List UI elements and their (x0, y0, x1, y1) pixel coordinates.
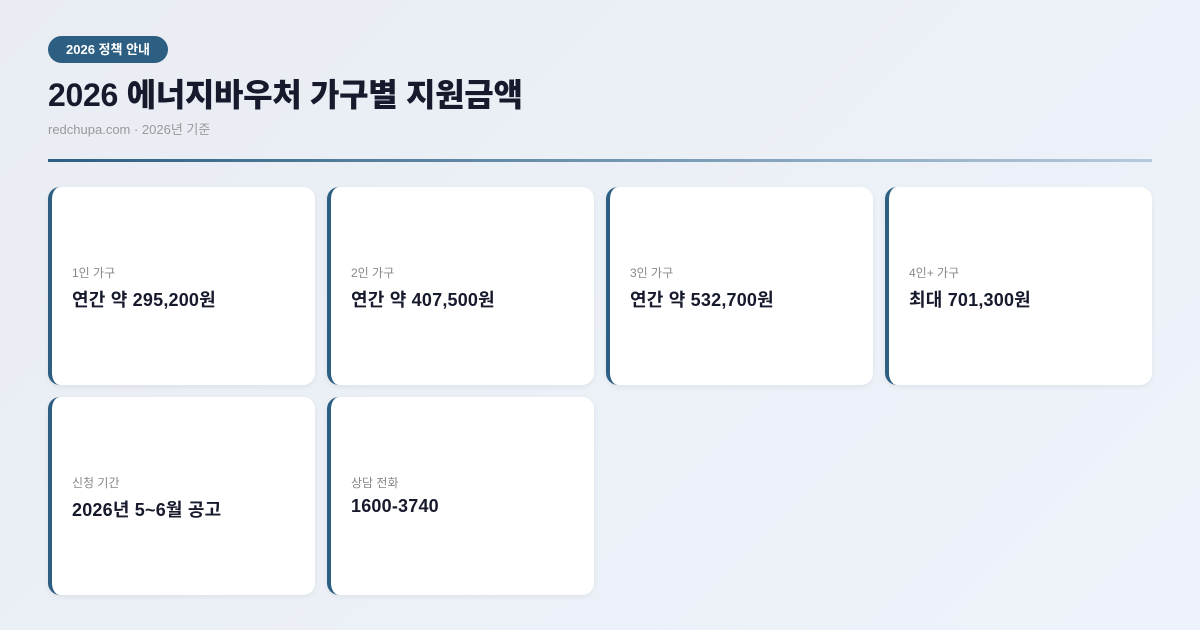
subtitle: redchupa.com · 2026년 기준 (48, 122, 210, 137)
card: 상담 전화: 상담 전화 (351, 476, 398, 490)
card: 4인+ 가구: 4인+ 가구 (909, 266, 959, 280)
card: 3인 가구: 연간 약 532,700원 (630, 290, 774, 310)
card: 1인 가구 (48, 187, 315, 385)
card: 신청 기간: 2026년 5~6월 공고 (72, 500, 221, 520)
card: 2인 가구: 연간 약 407,500원 (351, 290, 495, 310)
badge: 2026 정책 안내 (66, 42, 150, 57)
card: 2인 가구: 2인 가구 (351, 266, 394, 280)
card: 2인 가구 (327, 187, 594, 385)
card: 신청 기간: 신청 기간 (72, 476, 120, 490)
card: 상담 전화: 1600-3740 (351, 496, 439, 516)
card: 신청 기간 (48, 397, 315, 595)
card: 4인+ 가구 (885, 187, 1152, 385)
card: 3인 가구 (606, 187, 873, 385)
card: 상담 전화 (327, 397, 594, 595)
badge (48, 36, 168, 63)
card: 1인 가구: 연간 약 295,200원 (72, 290, 216, 310)
title: 2026 에너지바우처 가구별 지원금액 (48, 77, 523, 113)
card: 4인+ 가구: 최대 701,300원 (909, 290, 1031, 310)
card: 1인 가구: 1인 가구 (72, 266, 115, 280)
card: 3인 가구: 3인 가구 (630, 266, 673, 280)
